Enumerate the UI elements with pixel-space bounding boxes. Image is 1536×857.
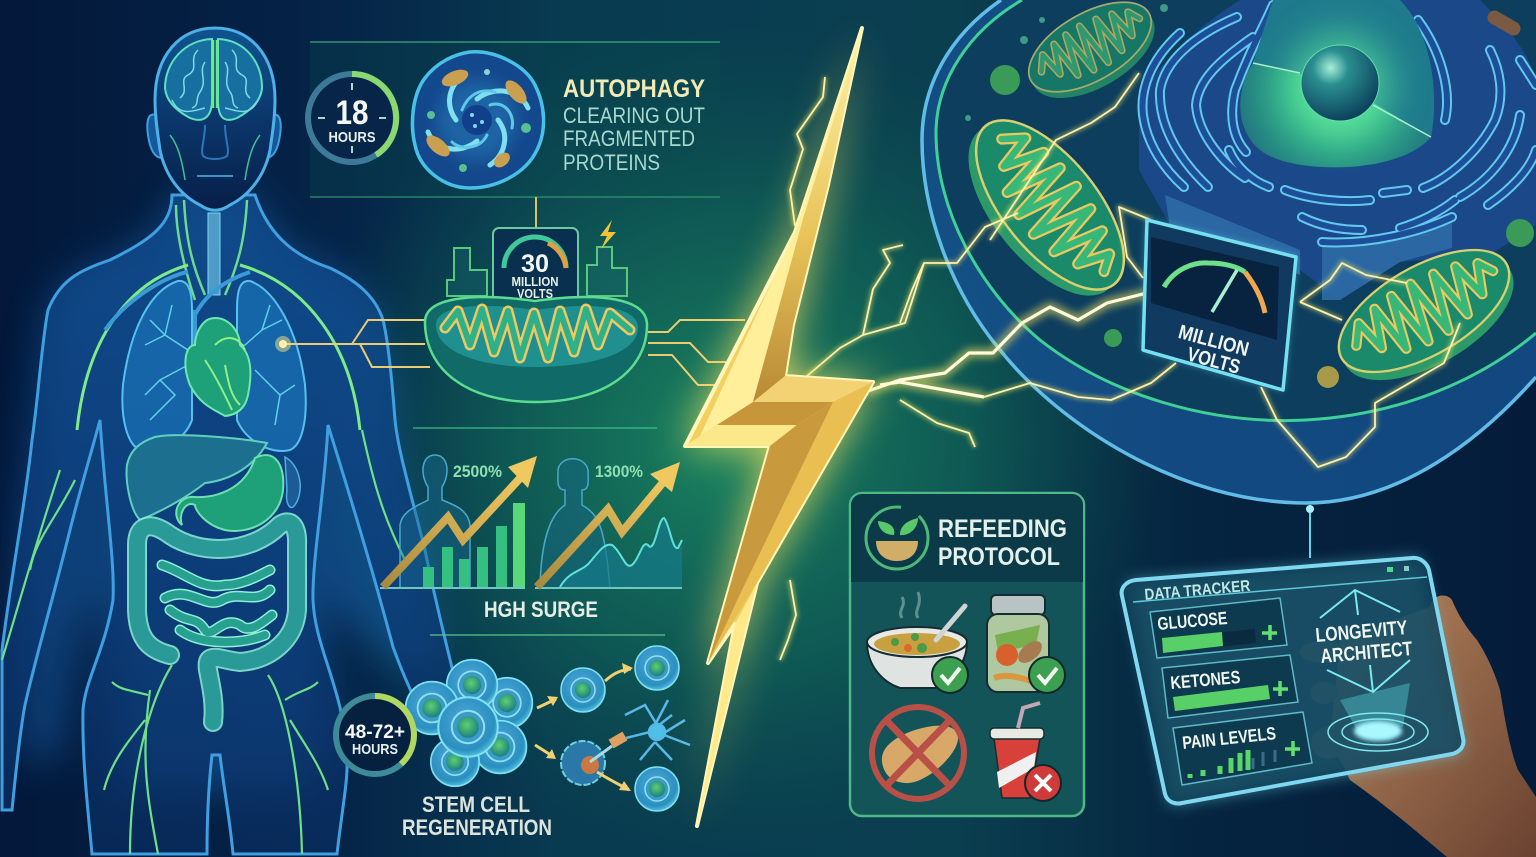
mitochondrion right — [1320, 225, 1533, 406]
gauge panel: million volts: VOLTS — [1185, 344, 1242, 379]
panel divider — [430, 634, 665, 636]
band top — [753, 376, 873, 402]
hologram crystal — [1320, 590, 1410, 692]
text: autophagy: AUTOPHAGY — [563, 75, 705, 103]
center glow — [300, 25, 1160, 855]
colon core — [137, 522, 297, 722]
section divider — [413, 427, 657, 429]
panel: data tracker tablet — [1122, 558, 1463, 805]
autophagy band shade — [310, 43, 720, 197]
mitochondrion left — [941, 96, 1151, 321]
main lightning bolt — [685, 28, 873, 826]
stem cell cluster — [406, 660, 532, 786]
text: longevity architect: LONGEVITY — [1315, 617, 1409, 647]
hgh surge chart: female — [535, 459, 682, 588]
heart detail — [205, 338, 245, 410]
nucleus wedge — [1240, 63, 1431, 167]
lower walls — [1165, 195, 1452, 300]
heading: stem cell regeneration: STEM CELL — [422, 792, 530, 817]
mitochondrion top — [1014, 0, 1170, 117]
gauge: 30 million volts — [493, 228, 578, 304]
gauge: 30 million volts: MILLION — [512, 275, 558, 289]
cell cross-section — [922, 0, 1536, 503]
timer: 18 hours: HOURS — [328, 129, 376, 146]
nucleus glow — [1290, 35, 1390, 135]
lung branches — [145, 305, 295, 425]
fingers behind tablet — [1300, 641, 1345, 759]
heading: data tracker: DATA TRACKER — [1144, 578, 1251, 604]
spike — [697, 583, 757, 826]
timer: 18 hours — [308, 74, 396, 162]
wedge edges — [1253, 63, 1431, 137]
icon: soup bowl — [867, 592, 968, 693]
hologram rings — [1328, 713, 1428, 751]
row: pain levels — [1173, 712, 1312, 785]
icon: no soda — [990, 703, 1061, 801]
hologram beam — [1340, 683, 1410, 730]
differentiated cells — [561, 646, 679, 811]
icon: no bread — [872, 707, 964, 799]
row: glucose — [1150, 598, 1287, 658]
small intestine core — [162, 565, 272, 642]
heart — [185, 318, 250, 416]
text: longevity architect — [1315, 617, 1413, 668]
status icons — [1387, 566, 1409, 572]
row: glucose: GLUCOSE — [1157, 608, 1228, 634]
gauge: 30 million volts: 30 — [521, 250, 549, 278]
lower shade — [708, 402, 833, 663]
row: pain levels: PAIN LEVELS — [1181, 723, 1277, 753]
text: autophagy: CLEARING OUT — [563, 103, 705, 128]
connector: mitochondrion to bolt — [648, 320, 745, 385]
neuron — [625, 700, 690, 760]
hgh surge chart: male: 2500% — [453, 462, 502, 481]
timer: 48-72+ hours: 48-72+ — [345, 722, 405, 743]
heading: stem cell regeneration — [402, 792, 552, 840]
icon: autophagy cell — [412, 52, 544, 188]
liver — [127, 435, 267, 520]
title rule — [1133, 577, 1427, 602]
timer: 48-72+ hours: HOURS — [352, 741, 398, 758]
icon: fermented jar — [987, 595, 1065, 693]
lower face — [708, 382, 873, 663]
connector line — [535, 197, 537, 228]
main mitochondrion — [425, 297, 647, 402]
brain — [165, 39, 262, 120]
panel: refeeding protocol — [850, 493, 1084, 816]
inner membrane line — [936, 0, 1536, 421]
row: ketones — [1162, 655, 1298, 718]
colon — [137, 522, 297, 722]
ears — [147, 114, 281, 158]
hgh surge chart: female: 1300% — [595, 462, 643, 481]
row: ketones: KETONES — [1170, 667, 1241, 693]
text: autophagy: FRAGMENTED — [563, 126, 695, 151]
text: longevity architect: ARCHITECT — [1320, 638, 1413, 668]
spleen — [285, 457, 300, 507]
nucleus upper — [1253, 0, 1434, 137]
panel header — [851, 494, 1083, 582]
text: refeeding protocol: REFEEDING — [938, 515, 1067, 543]
icon: small bolt — [600, 220, 616, 249]
small intestine — [162, 565, 272, 642]
upper facet — [753, 28, 862, 402]
body silhouette — [2, 195, 460, 854]
panel divider — [310, 196, 720, 198]
left lung — [122, 281, 192, 451]
hand — [1330, 596, 1536, 857]
stomach — [176, 455, 283, 531]
endoplasmic reticulum tubes — [1142, 5, 1536, 242]
middle band — [717, 402, 833, 425]
top divider — [310, 41, 720, 43]
major vessels — [77, 265, 360, 430]
skyline behind gauge — [447, 247, 627, 296]
cell interior — [936, 0, 1536, 421]
gauge: 30 million volts: VOLTS — [517, 287, 553, 301]
heading: stem cell regeneration: REGENERATION — [402, 815, 552, 840]
cell outer membrane line — [922, 0, 1536, 503]
text: autophagy — [563, 75, 705, 175]
nucleolus — [1301, 45, 1379, 121]
human body — [2, 28, 460, 854]
cell outer body — [922, 0, 1536, 503]
connector: cell to tablet — [1306, 505, 1314, 558]
text: refeeding protocol: PROTOCOL — [938, 543, 1060, 571]
heading: hgh surge: HGH SURGE — [484, 597, 598, 622]
gauge panel: million volts — [1143, 220, 1296, 390]
connector: heart to mitochondrion — [275, 320, 430, 367]
neck vessels — [176, 200, 247, 300]
head — [155, 28, 275, 210]
text: autophagy: PROTEINS — [563, 150, 660, 175]
organelle block — [1139, 0, 1536, 300]
hologram glow — [1354, 721, 1402, 741]
timer: 48-72+ hours — [336, 696, 414, 774]
icon: bowl and leaf — [866, 507, 928, 569]
text: refeeding protocol — [938, 515, 1067, 571]
face features — [170, 125, 260, 180]
upper highlight — [700, 28, 862, 436]
hgh surge chart: male — [380, 455, 537, 588]
vesicles — [965, 4, 1534, 388]
right lung — [237, 281, 306, 451]
nerves — [2, 430, 405, 854]
lightning bolt glow — [685, 28, 873, 826]
differentiation arrows — [535, 669, 631, 790]
trachea — [208, 213, 220, 295]
body glow — [18, 195, 440, 790]
gauge panel: million volts: MILLION — [1176, 321, 1251, 361]
left strip — [685, 425, 797, 446]
timer: 18 hours: 18 — [336, 94, 368, 132]
lightning branches — [780, 73, 1460, 660]
arrowheads — [546, 663, 633, 791]
